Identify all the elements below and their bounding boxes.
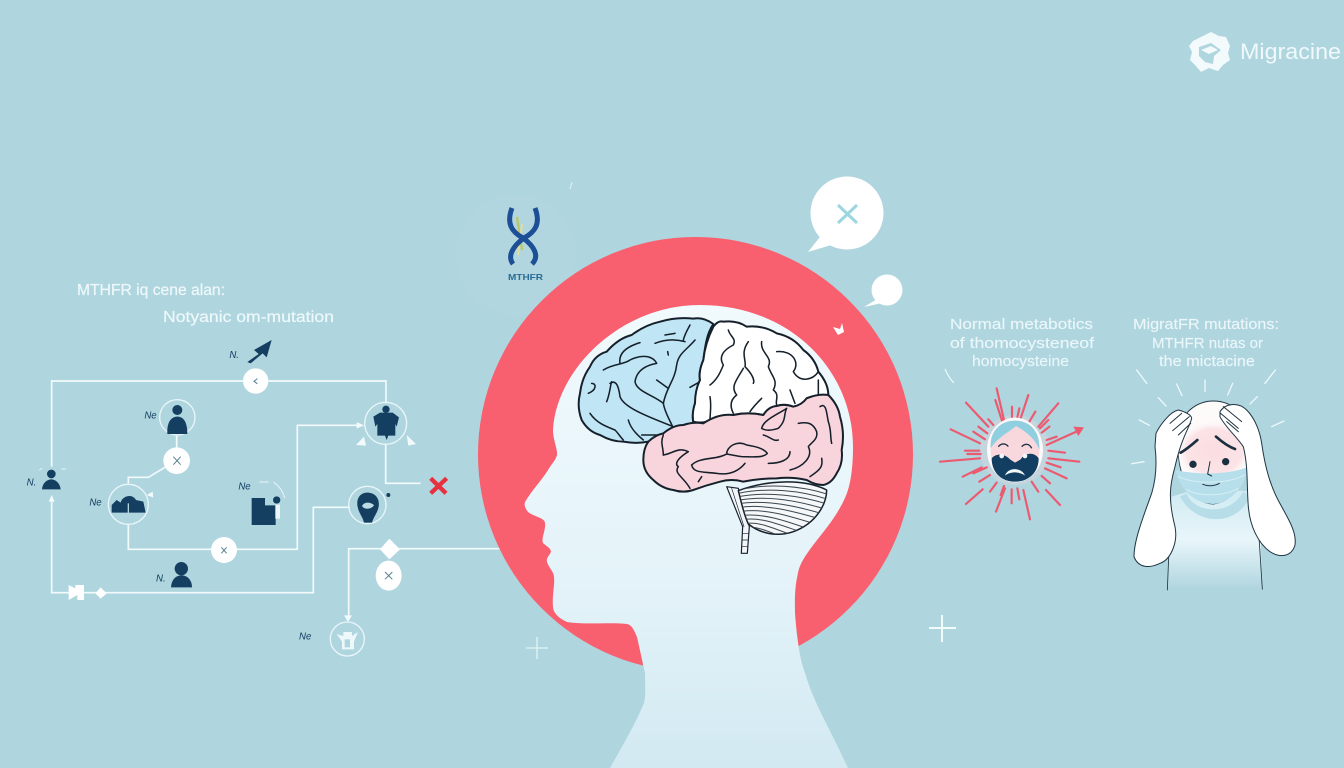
node: top circle <box>243 368 268 394</box>
left arm and hand <box>1134 410 1192 567</box>
brain <box>579 318 843 553</box>
speech bubble: x <box>808 176 884 252</box>
node labels <box>27 350 312 642</box>
node labels: Ne <box>299 631 312 642</box>
head <box>1178 401 1250 504</box>
node: x circle lower <box>376 561 402 591</box>
spark top <box>570 182 572 189</box>
group icon ringed <box>108 484 148 524</box>
node labels: N. <box>229 350 239 361</box>
ringed person right top <box>365 402 407 444</box>
ringed icon bottom <box>330 622 364 656</box>
right arm and hand <box>1220 405 1295 556</box>
node labels: Ne <box>144 411 157 422</box>
icon: pain burst face <box>940 388 1084 519</box>
arrow: up right <box>247 340 272 363</box>
node labels: N. <box>27 478 36 489</box>
shirt <box>1167 490 1262 590</box>
forehead flush <box>1178 415 1250 473</box>
speech bubble: small <box>864 274 902 307</box>
temporal lobe: pink <box>643 395 843 492</box>
collar <box>1180 492 1250 519</box>
text block: normal metabolism: homocysteine <box>972 354 1069 370</box>
node: x circle upper <box>163 447 190 474</box>
text block: migraine mutations: MTHFR nutas or <box>1152 336 1263 352</box>
faint DNA halo <box>456 195 576 315</box>
red circle <box>478 237 913 672</box>
plus: bottom centre <box>526 637 548 659</box>
eyes and brows <box>1181 437 1235 476</box>
text block: normal metabolism: Normal metabotics <box>950 317 1093 333</box>
node labels: Ne <box>89 498 102 509</box>
person holding head in pain <box>1132 370 1295 590</box>
node labels: Ne <box>238 481 251 492</box>
logo: Migracine: Migracine <box>1240 39 1341 64</box>
face mask <box>1176 467 1248 504</box>
icon: DNA MTHFR: MTHFR <box>508 272 543 282</box>
person: bottom <box>171 562 192 587</box>
document icon <box>252 482 285 525</box>
person: ringed top <box>160 400 195 435</box>
text block: migraine mutations <box>1133 317 1279 370</box>
red cross <box>431 478 447 493</box>
person: left <box>39 468 66 489</box>
node labels: N. <box>156 573 166 584</box>
node: connector shapes <box>69 585 107 600</box>
parietal lobe: white <box>693 321 828 422</box>
text block: migraine mutations: the mictacine <box>1159 354 1255 370</box>
text block: normal metabolism <box>950 317 1095 370</box>
arrowheads <box>49 422 416 622</box>
spark on circle <box>833 323 844 335</box>
node: diamond <box>380 539 400 559</box>
flowchart: gene pathway <box>27 340 500 656</box>
node: x circle middle <box>211 537 237 563</box>
ringed head right <box>349 486 390 524</box>
head silhouette <box>525 305 853 768</box>
plus: right <box>929 615 956 642</box>
logo: Migracine <box>1189 32 1341 72</box>
brain stem <box>727 487 749 553</box>
heading: MTHFR gene plan: MTHFR iq cene alan: <box>77 282 225 299</box>
text block: migraine mutations: MigratFR mutations: <box>1133 317 1279 333</box>
frontal lobe: blue <box>579 318 713 443</box>
tick mark left of burst <box>945 369 954 383</box>
text block: normal metabolism: of thomocysteneof <box>950 336 1095 352</box>
icon: DNA MTHFR <box>508 208 543 282</box>
pain ticks <box>1132 370 1284 464</box>
cerebellum <box>738 482 830 538</box>
heading: mutation: Notyanic om-mutation <box>163 309 334 326</box>
